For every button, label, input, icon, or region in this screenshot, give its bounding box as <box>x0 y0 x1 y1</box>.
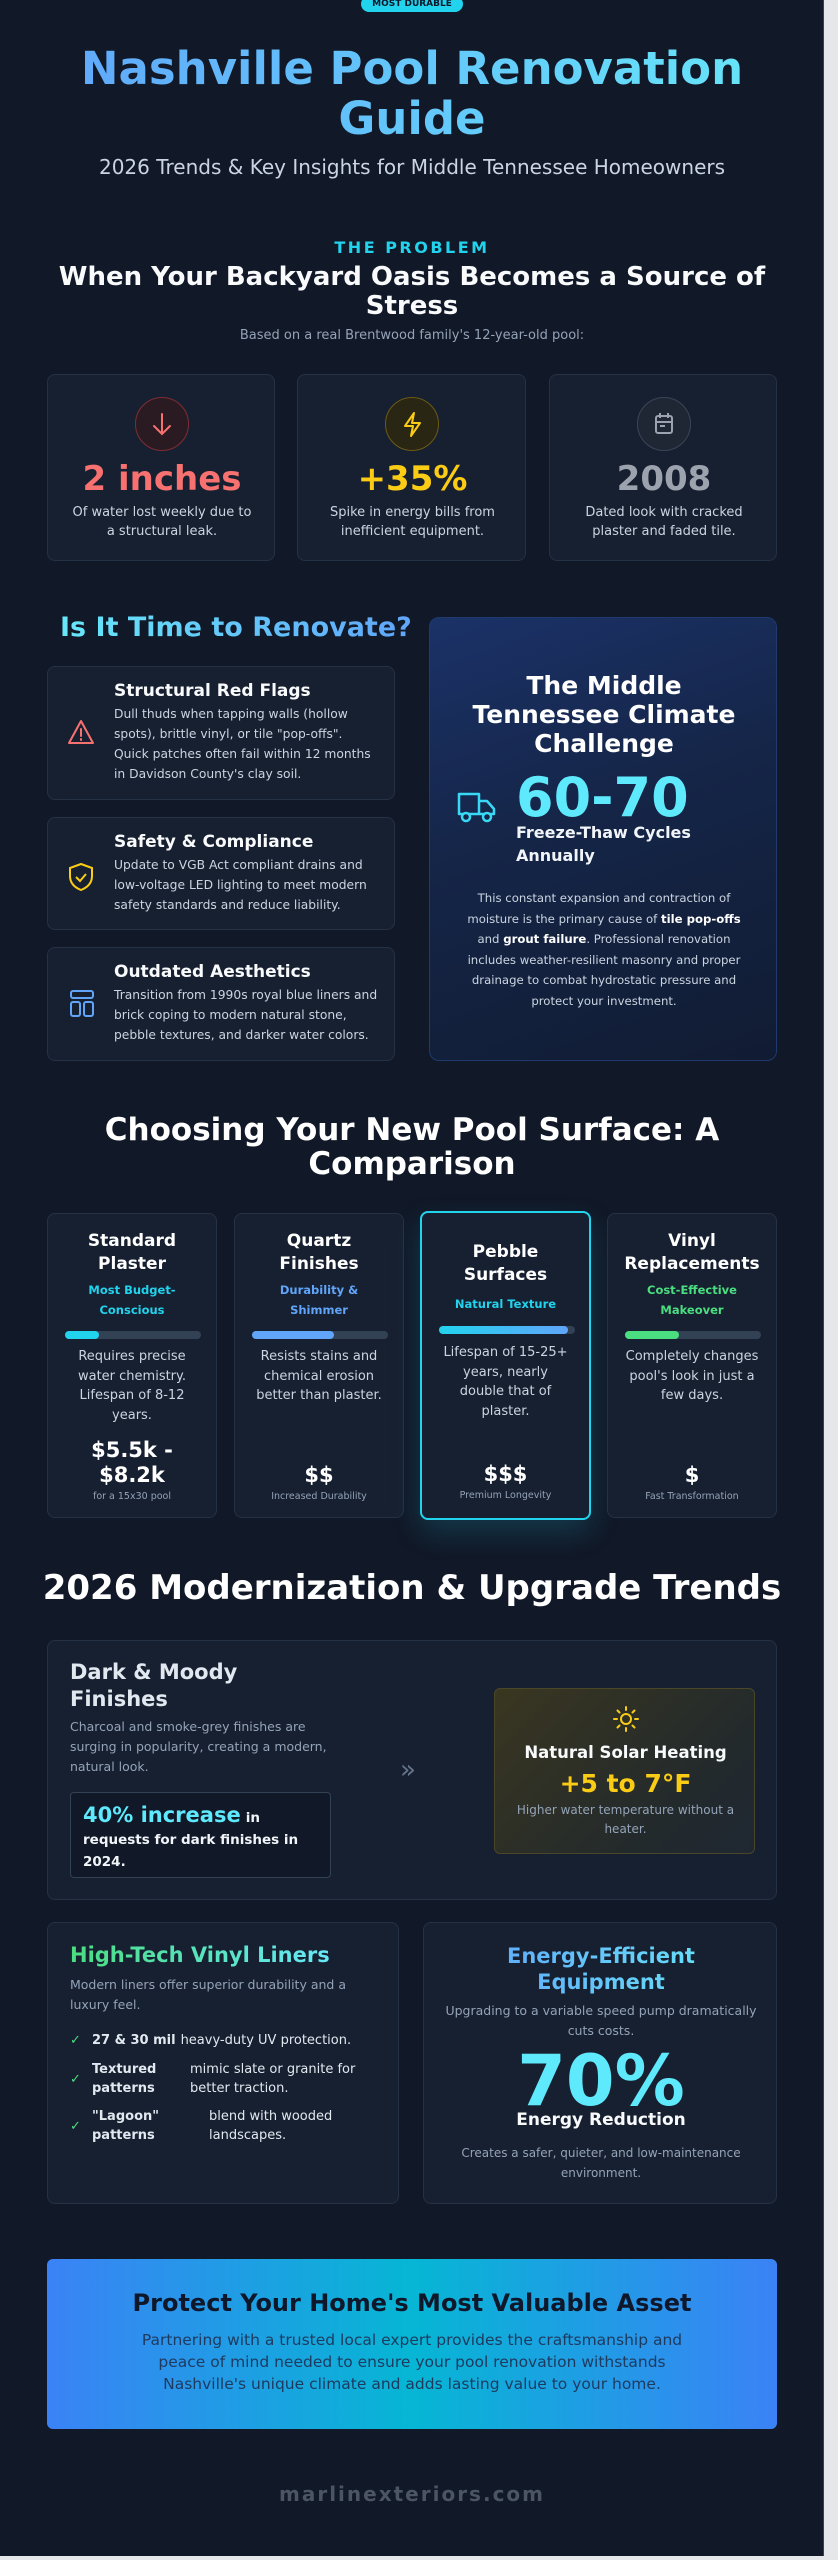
title: Energy-Efficient Equipment <box>507 1944 695 1994</box>
text: Update to VGB Act compliant drains and low-voltage LED lighting to meet modern safety standards and reduce liability. <box>114 858 367 912</box>
callout: 40% increase <box>70 1792 331 1878</box>
title: Natural Solar Heating <box>524 1743 727 1762</box>
list: mimic slate or granite for better traction. <box>190 2062 355 2096</box>
list: ✓ <box>70 2118 81 2134</box>
title <box>464 1943 738 1995</box>
text: Charcoal and smoke-grey finishes are surging in popularity, creating a modern, natural look. <box>70 1719 327 1774</box>
price: $ <box>685 1463 699 1487</box>
subtitle: 2026 Trends & Key Insights for Middle Tennessee Homeowners <box>99 155 725 179</box>
text: Transition from 1990s royal blue liners and brick coping to modern natural stone, pebble textures, and darker water colors. <box>114 988 377 1042</box>
panel: dark & moody <box>47 1640 777 1900</box>
subtext: based on: Based on a real Brentwood family's 12-year-old pool: <box>240 328 584 343</box>
cta text: Partnering with a trusted local expert provides the craftsmanship and peace of mind needed to ensure your pool renovation withstands Nashville's unique climate and adds lasting value to your home. <box>142 2331 682 2393</box>
list: "Lagoon" patterns <box>92 2109 159 2143</box>
stat card: +35% <box>297 374 526 561</box>
icon: sun <box>613 1706 639 1732</box>
bar <box>439 1326 575 1334</box>
card: safety & compliance <box>47 817 395 930</box>
cta title: Protect Your Home's Most Valuable Asset <box>133 2289 691 2317</box>
stat label: Energy Reduction <box>516 2110 686 2130</box>
tag: Durability & Shimmer <box>280 1283 358 1317</box>
value: 2008 <box>617 459 711 499</box>
title: Vinyl Replacements <box>624 1231 760 1274</box>
badge: most durable <box>361 0 463 12</box>
title <box>20 44 804 144</box>
tag: Cost-Effective Makeover <box>647 1283 737 1317</box>
list: 27 & 30 mil <box>92 2033 176 2048</box>
value: 2 inches <box>82 459 242 499</box>
text: Higher water temperature without a heater. <box>517 1803 734 1836</box>
icon: calendar <box>637 397 691 451</box>
list: Textured patterns <box>92 2062 156 2096</box>
value: +5 to 7°F <box>560 1769 691 1798</box>
text: Modern liners offer superior durability and a luxury feel. <box>70 1977 346 2012</box>
price label: Increased Durability <box>271 1491 367 1502</box>
stat label: Freeze-Thaw Cycles Annually <box>516 823 691 865</box>
list: ✓ <box>70 2072 81 2086</box>
description: Completely changes pool's look in just a few days. <box>626 1349 758 1403</box>
icon: arrow down <box>135 397 189 451</box>
price: $$$ <box>484 1462 527 1486</box>
text: Creates a safer, quieter, and low-maintenance environment. <box>461 2146 741 2180</box>
stat: 60-70: 60-70 <box>516 766 689 829</box>
heading: comparison: Choosing Your New Pool Surface: A Comparison <box>105 1112 719 1182</box>
title: Structural Red Flags <box>114 681 311 701</box>
title: High-Tech Vinyl Liners <box>70 1943 330 1967</box>
card: quartz finishes <box>234 1213 404 1518</box>
cta banner <box>47 2259 777 2429</box>
text: Dull thuds when tapping walls (hollow spots), brittle vinyl, or tile "pop-offs". Quick patches often fail within 12 months in Davidson County's clay soil. <box>114 707 371 781</box>
price label: Fast Transformation <box>645 1491 739 1502</box>
card: outdated aesthetics <box>47 947 395 1061</box>
panel: climate challenge <box>429 617 777 1061</box>
arrow: chevrons: » <box>400 1755 416 1785</box>
text: Upgrading to a variable speed pump dramatically cuts costs. <box>445 2003 757 2038</box>
list <box>70 2033 356 2143</box>
title: Pebble Surfaces <box>464 1242 547 1285</box>
title: Guide <box>338 92 486 145</box>
stat: 70%: 70% <box>517 2040 685 2122</box>
description: Spike in energy bills from inefficient equipment. <box>330 505 495 539</box>
icon: warning <box>68 720 94 744</box>
price: $5.5k - $8.2k <box>91 1438 173 1487</box>
description: Lifespan of 15-25+ years, nearly double that of plaster. <box>443 1345 568 1418</box>
icon: layout <box>70 990 94 1017</box>
heading: is it time to renovate: Is It Time to Renovate? <box>60 612 412 643</box>
title: The Middle Tennessee Climate Challenge <box>473 671 735 758</box>
callout: solar heating <box>494 1688 755 1854</box>
section label: the problem: THE PROBLEM <box>334 238 490 257</box>
description: Resists stains and chemical erosion better than plaster. <box>256 1349 382 1403</box>
footer: marlinexteriors.com <box>279 2482 545 2506</box>
bar <box>65 1331 201 1339</box>
stat card: 2 inches <box>47 374 275 561</box>
title: Standard Plaster <box>88 1231 176 1274</box>
description: Dated look with cracked plaster and faded tile. <box>585 505 743 539</box>
card: vinyl replacements <box>607 1213 777 1518</box>
icon: truck <box>458 792 496 822</box>
paragraph: This constant expansion and contraction of moisture is the primary cause of tile pop-offs and grout failure. Professional renovation includes weather-resilient masonry and proper drainage to combat hydrostatic pressure and protect your investment. <box>467 891 741 1008</box>
title: Dark & Moody Finishes <box>70 1660 237 1711</box>
bar <box>252 1331 388 1339</box>
bar <box>625 1331 761 1339</box>
heading: problem: When Your Backyard Oasis Becomes a Source of Stress <box>59 262 765 321</box>
price label: for a 15x30 pool <box>93 1491 171 1502</box>
tag: Most Budget-Conscious <box>88 1283 176 1317</box>
icon: shield <box>69 862 93 892</box>
card: structural red flags <box>47 666 395 800</box>
value: +35% <box>358 459 467 499</box>
list: heavy-duty UV protection. <box>181 2033 351 2048</box>
card: pebble surfaces (highlighted) <box>420 1211 591 1520</box>
panel: vinyl liners <box>47 1922 399 2204</box>
price: $$ <box>304 1463 334 1487</box>
stat card: 2008 <box>549 374 777 561</box>
title: Nashville Pool Renovation <box>81 42 743 95</box>
icon: lightning <box>385 397 439 451</box>
panel: energy-efficient equipment <box>423 1922 777 2204</box>
description: Requires precise water chemistry. Lifespan of 8-12 years. <box>78 1349 186 1422</box>
description: Of water lost weekly due to a structural leak. <box>73 505 251 539</box>
title: Safety & Compliance <box>114 832 313 852</box>
price label: Premium Longevity <box>460 1490 551 1501</box>
card: standard plaster <box>47 1213 217 1518</box>
list: blend with wooded landscapes. <box>209 2109 332 2143</box>
tag: Natural Texture <box>455 1297 556 1311</box>
title: Outdated Aesthetics <box>114 962 311 982</box>
list: ✓ <box>70 2033 81 2048</box>
heading: trends: 2026 Modernization & Upgrade Trends <box>43 1568 781 1608</box>
callout: 40% increase: 40% increase in requests for dark finishes in 2024. <box>83 1803 298 1870</box>
title: Quartz Finishes <box>279 1231 359 1274</box>
